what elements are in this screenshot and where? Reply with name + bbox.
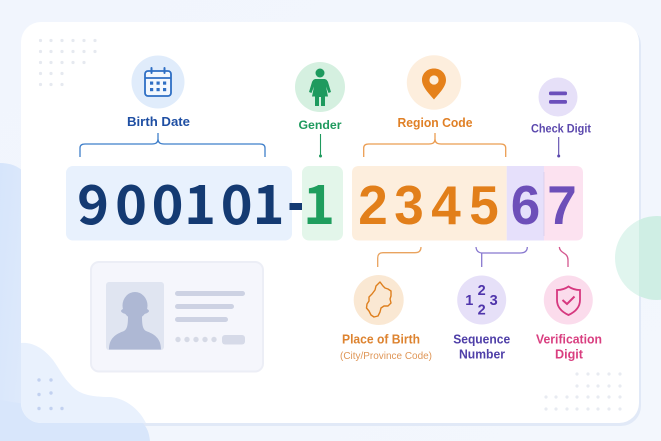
panel: region and check digits: 3 bbox=[394, 174, 424, 236]
icon: sequence numbers: 3 bbox=[490, 293, 498, 309]
connector: place of birth bbox=[378, 247, 421, 267]
connector: verification digit bbox=[559, 247, 568, 267]
icon: gender person bbox=[295, 62, 345, 112]
panel: region and check digits: 2 bbox=[358, 174, 388, 236]
label: Birth Date: Birth Date bbox=[127, 115, 190, 129]
icon: sequence numbers: 2 bbox=[478, 302, 486, 318]
panel: birth date digits bbox=[66, 161, 292, 240]
panel: birth date digits: 1 bbox=[184, 161, 216, 240]
background circle: green bbox=[615, 216, 661, 300]
connector: sequence number bbox=[476, 247, 527, 267]
label: Verification Digit: Verification bbox=[536, 332, 602, 346]
dots: bottom right bbox=[544, 372, 622, 411]
panel: region and check digits: 6 bbox=[511, 174, 540, 236]
icon: verification shield bbox=[544, 276, 593, 324]
label: Region Code: Region Code bbox=[398, 116, 473, 130]
icon: sequence numbers: 2 bbox=[478, 283, 486, 299]
label: Place of Birth: Place of Birth bbox=[342, 332, 420, 346]
panel: birth date digits: 1 bbox=[253, 161, 284, 240]
panel: region and check digits bbox=[352, 166, 583, 240]
icon: place of birth map bbox=[354, 275, 404, 325]
panel: birth date digits: 0 bbox=[152, 161, 183, 240]
panel: birth date digits: 0 bbox=[115, 161, 147, 240]
panel: region and check digits: 4 bbox=[431, 174, 461, 236]
label: Sequence Number bbox=[453, 332, 510, 362]
label: Verification Digit: Digit bbox=[555, 348, 584, 362]
icon: check digit equals bbox=[538, 78, 578, 116]
icon: sequence numbers: 1 bbox=[465, 293, 473, 309]
blob below card bbox=[0, 400, 150, 441]
label: Check Digit: Check Digit bbox=[531, 124, 591, 136]
panel: gender digit: 1 bbox=[303, 161, 335, 240]
panel: birth date digits: 0 bbox=[221, 161, 253, 240]
label: Sequence Number: Sequence bbox=[453, 332, 510, 346]
label: Verification Digit bbox=[536, 332, 602, 362]
panel: region and check digits: 5 bbox=[469, 174, 499, 236]
label: City/Province Code: (City/Province Code) bbox=[340, 351, 432, 362]
background blob: left bbox=[0, 163, 24, 441]
panel: region and check digits: 7 bbox=[547, 174, 577, 236]
icon: sequence numbers bbox=[457, 276, 506, 324]
arrow: gender bbox=[319, 134, 322, 158]
arrow: check digit bbox=[557, 137, 560, 158]
dash separator bbox=[290, 203, 302, 210]
brace: region code bbox=[364, 133, 506, 157]
dots: bottom left bbox=[37, 378, 64, 410]
card overlays bbox=[21, 220, 639, 423]
icon: region pin bbox=[407, 55, 461, 110]
illustration: ID card bbox=[91, 262, 263, 372]
dots: top left bbox=[39, 39, 97, 86]
panel: birth date digits: 9 bbox=[77, 161, 109, 240]
icon: birth date calendar bbox=[132, 56, 184, 108]
label: Gender: Gender bbox=[298, 118, 342, 132]
label: Sequence Number: Number bbox=[459, 348, 505, 362]
brace: birth date bbox=[80, 133, 265, 157]
